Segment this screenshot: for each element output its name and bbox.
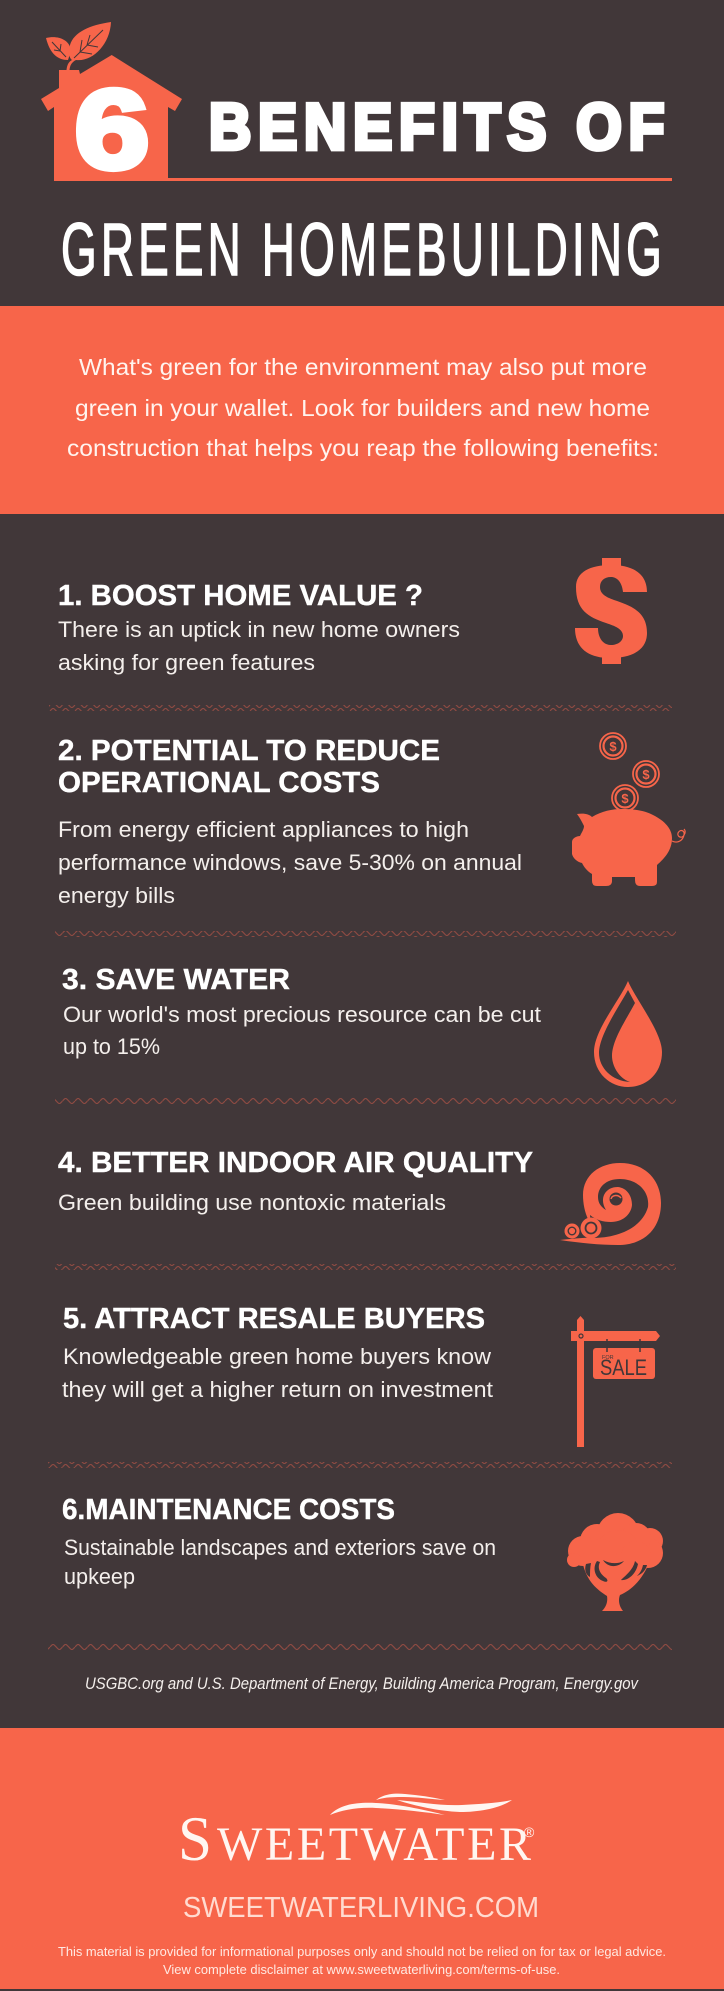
benefit 6: maintenance costs: 6.MAINTENANCE COSTS <box>62 1494 395 1526</box>
benefit 2: reduce operational costs: energy bills <box>58 883 175 908</box>
benefit 3: save water: 3. SAVE WATER <box>62 964 290 996</box>
intro text: What's green for the environment may also put more <box>79 354 647 380</box>
icon: for sale sign <box>571 1316 660 1447</box>
benefit 5: attract resale buyers: they will get a higher return on investment <box>62 1377 493 1402</box>
footer panel <box>0 1728 724 1989</box>
benefit 6: maintenance costs: upkeep <box>64 1564 135 1589</box>
icon: piggy bank with coins: $ <box>621 791 629 806</box>
icon: piggy bank with coins <box>572 733 685 886</box>
logo: sweetwater: S <box>178 1803 212 1874</box>
benefit 3: save water: up to 15% <box>63 1034 160 1059</box>
logo: sweetwater <box>178 1794 535 1874</box>
intro text <box>67 354 659 461</box>
heading: green homebuilding: GREEN HOMEBUILDING <box>61 209 662 292</box>
icon: water drop <box>594 981 662 1087</box>
benefit 3: save water <box>62 964 662 1087</box>
benefit 3: save water: Our world's most precious resource can be cut <box>63 1002 541 1027</box>
logo: sweetwater: WEETWATER <box>217 1818 531 1871</box>
icon: dollar sign <box>575 558 647 664</box>
benefit 4: better indoor air quality: 4. BETTER INDOOR AIR QUALITY <box>58 1147 533 1179</box>
intro panel <box>0 306 724 514</box>
icon: house with leaves <box>41 22 182 192</box>
benefit 5: attract resale buyers: Knowledgeable green home buyers know <box>63 1344 491 1369</box>
benefit 2: reduce operational costs: From energy efficient appliances to high <box>58 817 469 842</box>
benefit 1: boost home value: 1. BOOST HOME VALUE ? <box>58 580 423 612</box>
benefit 2: reduce operational costs: 2. POTENTIAL TO REDUCE <box>58 735 440 767</box>
logo: sweetwater: ® <box>524 1824 535 1840</box>
disclaimer: View complete disclaimer at www.sweetwaterliving.com/terms-of-use. <box>163 1962 560 1977</box>
icon: tree <box>567 1513 663 1611</box>
benefit 2: reduce operational costs <box>58 733 685 908</box>
benefit 1: boost home value: asking for green features <box>58 650 315 675</box>
intro text: construction that helps you reap the following benefits: <box>67 435 659 461</box>
disclaimer: This material is provided for informational purposes only and should not be relied on for tax or legal advice. <box>58 1944 666 1959</box>
heading underline <box>168 178 672 181</box>
benefit 1: boost home value: There is an uptick in new home owners <box>58 617 460 642</box>
icon: for sale sign: FOR <box>602 1355 614 1361</box>
icon: piggy bank with coins: $ <box>609 739 617 754</box>
benefit 5: attract resale buyers <box>62 1303 660 1447</box>
benefit 4: better indoor air quality <box>58 1147 661 1245</box>
benefit 6: maintenance costs <box>62 1494 663 1611</box>
benefit 2: reduce operational costs: performance windows, save 5-30% on annual <box>58 850 522 875</box>
icon: house with leaves: 6 <box>75 68 149 192</box>
heading: benefits of: BENEFITS OF <box>209 91 664 164</box>
benefit 5: attract resale buyers: 5. ATTRACT RESALE BUYERS <box>63 1303 485 1335</box>
disclaimer <box>58 1944 666 1977</box>
intro text: green in your wallet. Look for builders and new home <box>75 395 650 421</box>
website: SWEETWATERLIVING.COM <box>183 1892 539 1924</box>
icon: air swirl <box>560 1163 661 1245</box>
icon: for sale sign: SALE <box>600 1355 647 1380</box>
benefit 4: better indoor air quality: Green building use nontoxic materials <box>58 1190 446 1215</box>
icon: piggy bank with coins: $ <box>642 767 650 782</box>
header panel <box>41 22 672 292</box>
benefit 2: reduce operational costs: OPERATIONAL COSTS <box>58 767 380 799</box>
benefit 1: boost home value <box>58 558 647 675</box>
benefit 6: maintenance costs: Sustainable landscapes and exteriors save on <box>64 1535 496 1560</box>
source note: USGBC.org and U.S. Department of Energy, Building America Program, Energy.gov <box>85 1675 640 1693</box>
